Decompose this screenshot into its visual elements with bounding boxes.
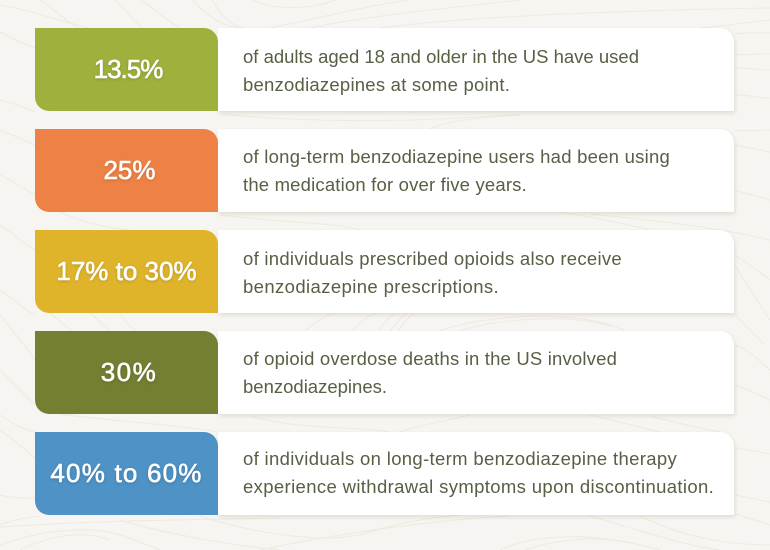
description text: benzodiazepine prescriptions. [243, 276, 499, 296]
stat: 25%: 25% [103, 155, 156, 185]
stat: 17% to 30%: 17% to 30% [56, 256, 197, 286]
row: 25% [35, 129, 736, 216]
stat: 13.5%: 13.5% [94, 54, 162, 84]
description text [243, 448, 714, 497]
description card [218, 230, 734, 313]
row: 30% [35, 331, 736, 418]
row: 40% to 60% [35, 432, 736, 518]
description text: benzodiazepines at some point. [243, 74, 510, 94]
description card [218, 432, 734, 515]
description card [218, 28, 734, 111]
description text [243, 348, 617, 397]
description text: of long-term benzodiazepine users had been using [243, 146, 670, 167]
description card [218, 331, 734, 414]
description text: of opioid overdose deaths in the US involved [243, 348, 617, 369]
description card [218, 129, 734, 212]
row: 13.5% [35, 28, 736, 114]
description text: benzodiazepines. [243, 376, 387, 396]
description text [243, 146, 670, 195]
stat: 30% [35, 331, 218, 414]
description text: experience withdrawal symptoms upon discontinuation. [243, 476, 714, 496]
stat: 25% [35, 129, 218, 212]
stat: 17% to 30% [35, 230, 218, 313]
row: 17% to 30% [35, 230, 736, 316]
description text: of individuals prescribed opioids also receive [243, 248, 622, 269]
description text: the medication for over five years. [243, 174, 527, 194]
stat: 13.5% [35, 28, 218, 111]
stat: 40% to 60%: 40% to 60% [50, 458, 203, 488]
description text: of individuals on long-term benzodiazepine therapy [243, 448, 677, 469]
description text [243, 46, 639, 95]
stat: 40% to 60% [35, 432, 218, 515]
stat: 30%: 30% [101, 357, 157, 387]
description text [243, 248, 622, 297]
description text: of adults aged 18 and older in the US have used [243, 46, 639, 67]
